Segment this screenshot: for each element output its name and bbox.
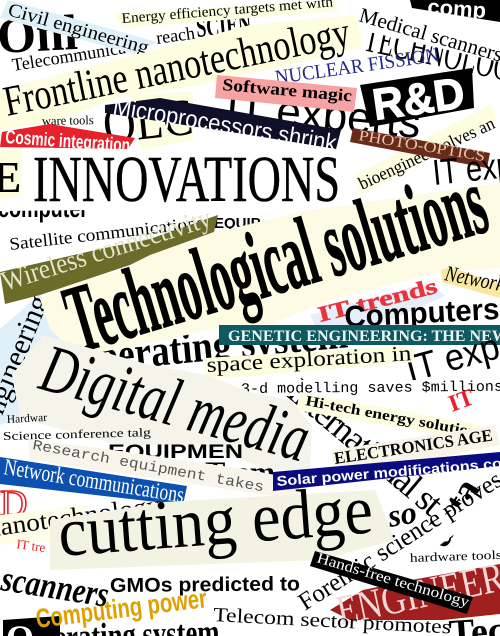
strip: R and D: R&D — [370, 69, 467, 130]
fragment: red letter D: D — [0, 483, 27, 525]
fragment: scanners: scanners — [0, 558, 112, 615]
strip: network communications — [0, 454, 187, 507]
fragment: science conference: Science conference talg — [3, 425, 151, 443]
strip: software magic: Software magic — [222, 75, 353, 105]
fragment: red marks: IT tre — [16, 536, 47, 555]
strip: hands-free technology: Hands-free technology — [315, 550, 471, 611]
strip: engineering left — [0, 290, 80, 425]
strip: network communications: Network communications — [2, 454, 186, 507]
fragment: letters behind: OLC — [100, 89, 196, 155]
title: innovations: INNOVATIONS — [33, 143, 340, 216]
strip: microprocessors shrink: Microprocessors shrink — [111, 93, 339, 157]
strip: hi-tech energy: Hi-tech energy solution — [304, 393, 479, 441]
panel: cutting edge: cutting edge — [55, 472, 375, 572]
fragment: operating: Operating system — [66, 308, 350, 384]
fragment: software tools: ware tools — [42, 113, 94, 128]
strip: hi-tech energy — [296, 392, 480, 441]
fragment: hardware tools: hardware tools — [410, 548, 500, 565]
fragment: GMOs predicted: GMOs predicted to — [110, 573, 300, 597]
fragment: IT experts: IT experts — [224, 82, 423, 148]
fragment: compute strip — [410, 0, 500, 23]
strip: solar power — [273, 452, 500, 491]
fragment: equipment: EQUIP — [214, 215, 261, 232]
strip: computing power: Computing power — [34, 583, 209, 634]
strip: cosmic integration — [0, 124, 135, 157]
strip: cosmic integration: Cosmic integration — [5, 127, 131, 157]
fragment: telecom sector: Telecom sector promotes — [213, 604, 452, 636]
panel: digital media — [12, 329, 318, 476]
title: innovations — [0, 143, 360, 216]
fragment: computers top: computer — [0, 193, 88, 223]
strip: research equipment: Research equipment takes — [31, 438, 265, 496]
strip: IT trends: IT trends — [315, 273, 440, 327]
fragment: equipment bold: EQUIPMEN — [108, 442, 243, 463]
strip: photo-optics: PHOTO-OPTICS — [357, 128, 486, 165]
strip: software magic — [215, 75, 357, 112]
strip: civil engineering: Civil engineering — [6, 0, 152, 59]
strip: research equipment — [28, 438, 300, 500]
fragment: 3-d modelling: 3-d modelling saves $millions — [241, 380, 500, 398]
fragment: data: data — [416, 471, 489, 554]
fragment: Telecommunications: Telecommunica — [10, 37, 127, 75]
strip: photo-optics — [350, 128, 490, 168]
fragment: red IT: IT — [445, 385, 478, 418]
fragment: bold italic so: so — [384, 493, 419, 534]
strip: solar power: Solar power modifications co — [276, 455, 500, 489]
fragment: international: International st — [280, 370, 451, 523]
fragment: hardware left: Hardwar — [7, 412, 47, 426]
fragment: satellite communications: Satellite communications — [8, 212, 205, 254]
fragment: trends bold: Trem — [205, 456, 275, 489]
strip: IT trends — [310, 273, 445, 327]
strip: space exploration: space exploration in — [206, 341, 412, 377]
panel: technological solutions — [40, 147, 500, 373]
panel: digital media: Digital media — [32, 329, 318, 476]
strip: medical scanners: Medical scanners — [357, 3, 500, 67]
strip: wireless connectivity: Wireless connectivity — [0, 203, 215, 298]
fragment: computers: Computers — [344, 293, 500, 334]
fragment: operating system bottom — [3, 612, 220, 636]
fragment: Science: SCIEN — [195, 8, 252, 44]
fragment: reach: reach — [155, 23, 196, 48]
strip: nuclear fission: NUCLEAR FISSION — [274, 44, 440, 89]
strip: genetic engineering: GENETIC ENGINEERING: THE NEW — [228, 328, 500, 345]
fragment: electronics age: ELECTRONICS AGE — [333, 426, 494, 468]
